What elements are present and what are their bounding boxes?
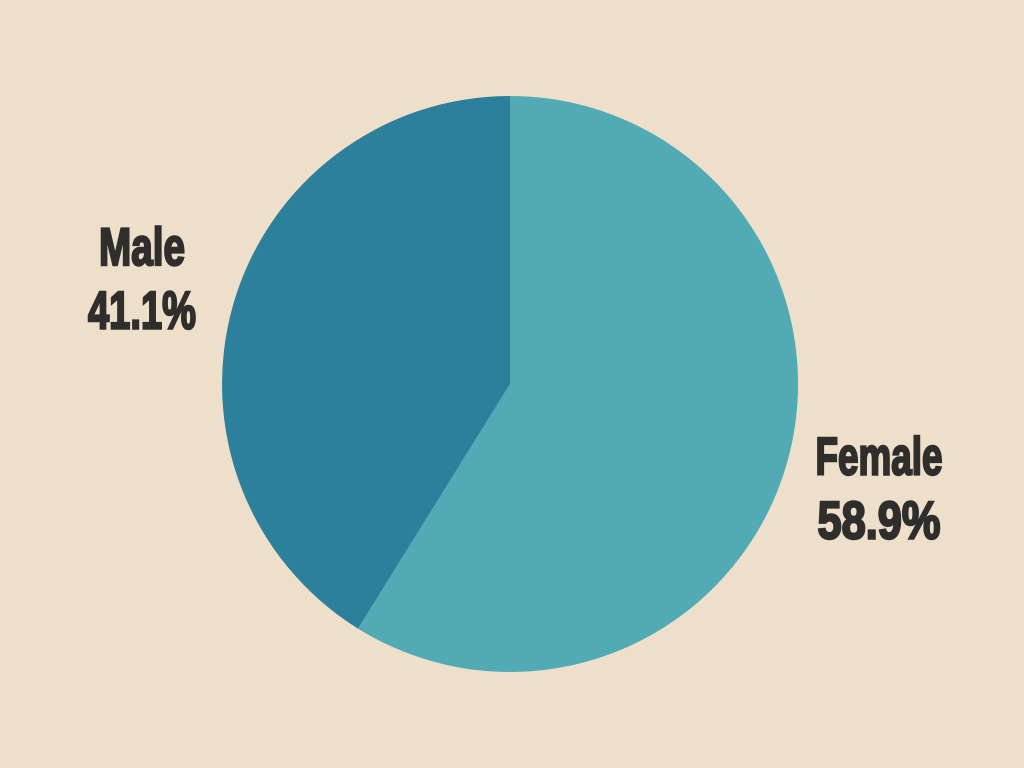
label text: Female: Female bbox=[816, 428, 942, 486]
label text: Male: Male bbox=[99, 218, 185, 277]
value text: 58.9%: 58.9% bbox=[818, 492, 940, 550]
pie chart bbox=[222, 96, 798, 672]
slice: male 41.1% bbox=[222, 96, 510, 629]
label: male bbox=[88, 218, 196, 340]
slice: female 58.9% bbox=[358, 96, 798, 672]
label: female bbox=[816, 428, 942, 550]
value text: 41.1%: 41.1% bbox=[88, 282, 196, 340]
